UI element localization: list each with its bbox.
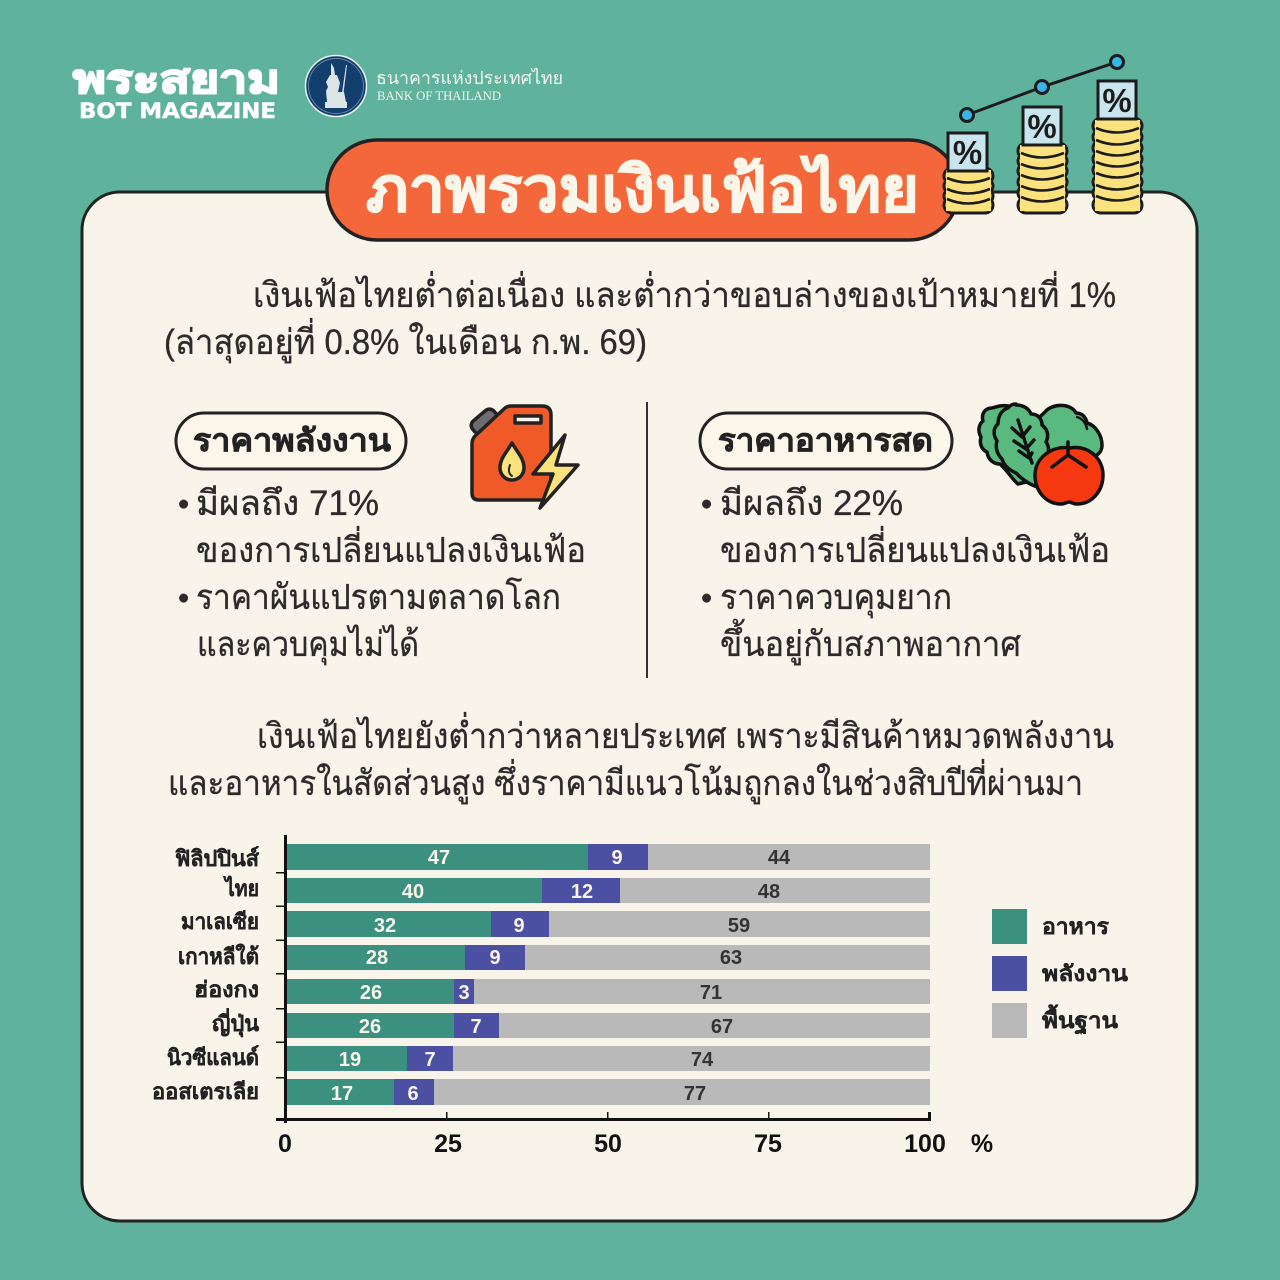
logo: Phra Siam BOT Magazine [73,58,280,123]
text: food bullet list [701,484,1110,665]
data labels: base: 48 [758,881,780,903]
text: food bullet list: • [701,580,712,616]
panel: fresh food prices [700,404,1110,665]
data labels: energy: 7 [470,1016,482,1038]
data labels: food [331,847,450,1105]
category labels: ออสเตรเลีย [152,1079,259,1104]
data labels: energy: 9 [611,847,623,869]
data labels: base: 44 [768,847,791,869]
coins: fill interior [946,120,1140,211]
logo: Bank of Thailand seal [306,56,366,116]
data labels: energy: 9 [489,947,501,969]
text: energy bullet list: และควบคุมไม่ได้ [197,624,419,665]
category labels: เกาหลีใต้ [178,943,259,969]
panel: main card [82,192,1197,1221]
heading: energy prices: ราคาพลังงาน [193,423,391,458]
data labels: food: 32 [374,915,396,937]
logo text: Bank of Thailand: ธนาคารแห่งประเทศไทย [376,67,563,88]
data labels: base: 67 [711,1016,733,1038]
legend: พื้นฐาน [1042,1004,1118,1035]
category labels: ไทย [223,875,259,901]
axis tick labels: % [971,1130,993,1158]
coins: silhouettes [944,118,1142,213]
axis tick labels: 75 [754,1130,782,1158]
data labels: food: 40 [402,881,424,903]
data labels: energy: 12 [571,881,593,903]
data labels: base: 59 [728,915,750,937]
data labels: energy: 6 [407,1083,419,1105]
bars: energy (blue) [394,844,648,1105]
axis tick labels [278,1130,993,1158]
icon: coin stacks with percent and rising line: % [953,134,982,171]
data labels: base: 74 [691,1049,714,1071]
legend: อาหาร [1042,914,1109,939]
text: energy bullet list: ราคาผันแปรตามตลาดโลก [196,577,561,617]
category labels: ฮ่องกง [194,977,259,1002]
heading: energy prices [176,413,406,469]
text: food bullet list: • [701,486,712,522]
coins: rim curves [947,128,1139,204]
text: energy bullet list [178,484,586,665]
category labels: นิวซีแลนด์ [167,1045,259,1070]
icon: coin stacks with percent and rising line [944,56,1142,213]
icon: coin stacks with percent and rising line: % [1102,82,1132,119]
category labels: ฟิลิปปินส์ [175,846,260,871]
data labels: base: 71 [700,982,722,1004]
logo text: Bank of Thailand [376,67,563,103]
axes [276,835,931,1123]
text: energy bullet list: • [178,486,189,522]
logo: Phra Siam BOT Magazine: BOT MAGAZINE [79,99,276,123]
text: food bullet list: ราคาควบคุมยาก [720,578,952,618]
axis tick labels: 0 [278,1130,292,1158]
text: energy bullet list: มีผลถึง 71% [196,484,379,523]
bars: food (green) [286,844,588,1105]
text: intro paragraph 1: เงินเฟ้อไทยต่ำต่อเนื่อง และต่ำกว่าขอบล่างของเป้าหมายที่ 1% [253,271,1116,315]
data labels: energy: 7 [424,1049,436,1071]
data labels: food: 28 [366,947,388,969]
text: intro paragraph 1 [164,271,1116,363]
data labels: food: 26 [360,982,382,1004]
text: chart introduction: และอาหารในสัดส่วนสูง ซึ่งราคามีแนวโน้มถูกลงในช่วงสิบปีที่ผ่านมา [168,759,1083,804]
data labels: food: 19 [339,1049,361,1071]
data labels: food: 47 [428,847,450,869]
axis tick labels: 100 [904,1130,946,1158]
text: energy bullet list: • [178,580,189,616]
icon: fuel can with lightning [469,406,578,508]
axis tick labels: 25 [434,1130,462,1158]
category labels: ญี่ปุ่น [212,1007,259,1038]
logo: Phra Siam BOT Magazine: พระสยาม [73,58,280,102]
text: intro paragraph 1: (ล่าสุดอยู่ที่ 0.8% ในเดือน ก.พ. 69) [164,318,647,363]
logo text: Bank of Thailand: BANK OF THAILAND [377,89,501,103]
data labels: food: 26 [359,1016,381,1038]
text: energy bullet list: ของการเปลี่ยนแปลงเงินเฟ้อ [196,526,586,570]
title banner: ภาพรวมเงินเฟ้อไทย [366,154,919,225]
text: food bullet list: ขึ้นอยู่กับสภาพอากาศ [720,618,1021,665]
icon: vegetables and tomato [979,404,1103,504]
text: chart introduction: เงินเฟ้อไทยยังต่ำกว่าหลายประเทศ เพราะมีสินค้าหมวดพลังงาน [257,712,1114,756]
category labels [152,846,260,1104]
bars: base (grey) [434,844,930,1105]
panel: energy prices [176,406,586,665]
legend: พลังงาน [1042,961,1128,986]
title banner [327,140,959,240]
data labels: energy: 3 [458,982,470,1004]
icon: coin stacks with percent and rising line: % [1027,108,1057,145]
data labels: food: 17 [331,1083,353,1105]
data labels: base: 77 [684,1083,706,1105]
text: food bullet list: มีผลถึง 22% [720,484,903,523]
data labels: energy [407,847,623,1105]
legend [992,909,1128,1038]
text: food bullet list: ของการเปลี่ยนแปลงเงินเฟ้อ [720,526,1110,570]
data labels: base: 63 [720,947,742,969]
data labels: energy: 9 [513,915,525,937]
heading: fresh food prices: ราคาอาหารสด [718,423,933,458]
divider [646,402,648,678]
category labels: มาเลเซีย [181,909,259,934]
heading: fresh food prices [700,413,952,469]
axis tick labels: 50 [594,1130,622,1158]
data labels: base [684,847,791,1105]
text: chart introduction [168,712,1114,804]
chart: stacked bar of CPI composition by country [152,835,993,1158]
